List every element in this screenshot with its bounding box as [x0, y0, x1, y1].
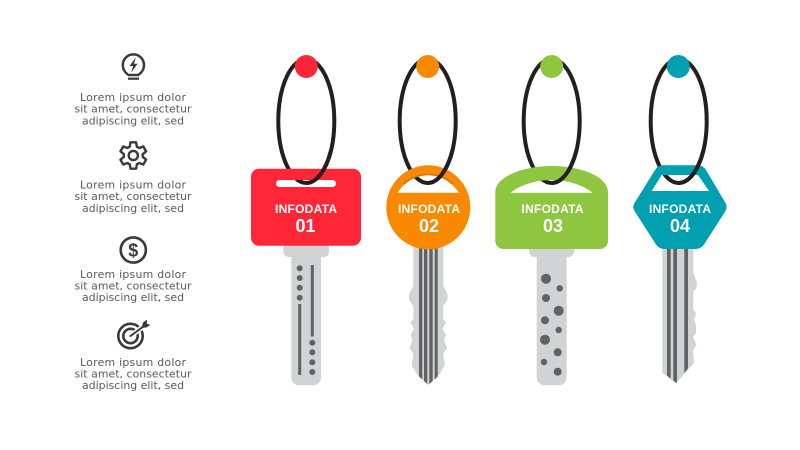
hole shadow 02	[404, 175, 452, 184]
key 01: red rectangular	[251, 55, 361, 385]
label 01	[275, 202, 337, 236]
key 04: teal hexagon	[633, 55, 726, 384]
key blade 01	[283, 240, 329, 385]
key ring 02	[400, 59, 456, 183]
label 01: 01	[295, 216, 316, 236]
sidebar: list of four items	[74, 54, 192, 392]
key ring 03	[524, 59, 580, 183]
ring front 02	[428, 150, 455, 185]
key blade 04	[662, 240, 697, 384]
label 03	[522, 202, 584, 236]
text: item three: Lorem ipsum dolor	[80, 268, 187, 281]
ring front 01	[306, 150, 334, 185]
tag 02	[386, 165, 470, 249]
tag 03	[495, 166, 608, 249]
text: item one: sit amet, consectetur	[74, 103, 192, 116]
pin 04	[667, 55, 690, 78]
key ring 04	[651, 59, 707, 183]
text: item two: sit amet, consectetur	[74, 190, 192, 203]
icon: gear	[120, 142, 146, 169]
text: item two: adipiscing elit, sed	[82, 202, 184, 215]
icon: dollar coin	[121, 237, 146, 263]
text: item four: adipiscing elit, sed	[82, 379, 184, 392]
label 04: INFODATA	[649, 202, 711, 216]
key blade 03	[529, 240, 574, 385]
label 04	[649, 202, 711, 236]
ring front 04	[679, 150, 706, 185]
text: item one: adipiscing elit, sed	[82, 114, 184, 127]
label 03: 03	[543, 216, 563, 236]
label 02	[398, 202, 460, 236]
tag 01	[251, 169, 361, 246]
icon: dollar coin: $	[128, 240, 138, 260]
key ring 01	[278, 59, 334, 183]
text: item three	[74, 268, 192, 304]
label 02: INFODATA	[398, 202, 460, 216]
label 01: INFODATA	[275, 202, 337, 216]
text: item one	[74, 91, 192, 127]
label 02: 02	[419, 216, 439, 236]
pin 01	[295, 55, 318, 78]
text: item one: Lorem ipsum dolor	[80, 91, 187, 104]
icon: target with arrow	[118, 320, 150, 348]
icon: light bulb with bolt	[123, 54, 144, 79]
ring front 03	[552, 150, 579, 185]
text: item two	[74, 179, 192, 215]
label 03: INFODATA	[522, 202, 584, 216]
text: item four	[74, 356, 192, 392]
label 04: 04	[670, 216, 690, 236]
tag 04	[633, 165, 726, 249]
text: item three: adipiscing elit, sed	[82, 291, 184, 304]
key 03: green dome	[495, 55, 608, 385]
key blade 02	[409, 240, 448, 385]
pin 03	[540, 55, 563, 78]
pin 02	[416, 55, 439, 78]
key 02: orange round	[386, 55, 470, 385]
text: item two: Lorem ipsum dolor	[80, 179, 187, 192]
text: item three: sit amet, consectetur	[74, 280, 192, 292]
text: item four: Lorem ipsum dolor	[80, 356, 187, 369]
text: item four: sit amet, consectetur	[74, 368, 192, 380]
